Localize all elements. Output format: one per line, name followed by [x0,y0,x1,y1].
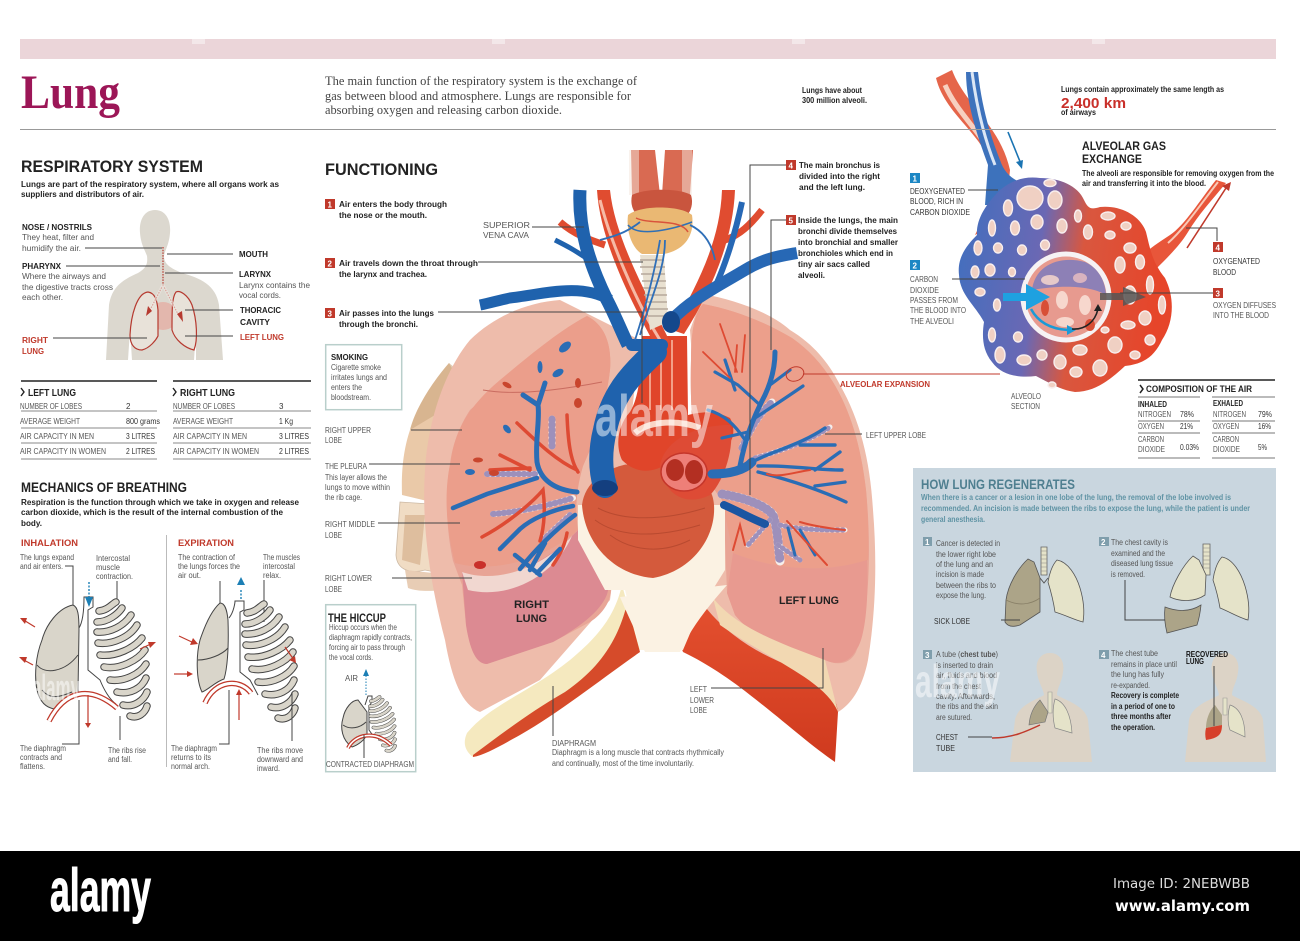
pulmonary vessels [936,70,1226,270]
label: left upper lobe [825,431,926,440]
panel: the hiccup [326,605,416,772]
arrow: oxygenated flow [1187,182,1231,248]
step 1: sick lobe: expose the lung. [936,591,986,600]
step 1: 1 [328,200,332,210]
table: left lung: 800 grams [126,417,160,426]
panel: expiration: The ribs move [257,746,303,755]
table: left lung: 2 LITRES [126,447,155,456]
label: right upper lobe: RIGHT UPPER [325,426,371,435]
step 1: sick lobe: between the ribs to [936,581,996,590]
panel: the hiccup: the vocal cords. [329,653,373,662]
veins [580,190,628,345]
icon: lung [36,605,79,709]
step 5: 5 [788,216,794,226]
icon: lung [197,603,228,692]
panel: how lung regenerates: When there is a cancer or a lesion in one lobe of the lung, the removal of the lobe involved is [921,493,1231,502]
table: composition of the air: 16% [1258,422,1271,431]
table: left lung: AIR CAPACITY IN MEN [20,432,94,441]
footer bar: Image ID: 2NEBWBB [1113,876,1250,892]
heading: respiratory system: suppliers and distributors of air. [21,190,144,199]
table: composition of the air [1138,380,1275,458]
panel: inhalation: contracts and [20,753,62,762]
title: Lung [21,66,120,119]
callout 2: carbon dioxide: THE BLOOD INTO [910,306,966,315]
arrow: carbon dioxide [1003,284,1076,335]
table: composition of the air: INHALED [1138,400,1167,409]
left lung body [690,294,875,712]
label: alveolar expansion [784,364,1000,389]
label: the pleura: the rib cage. [325,493,362,502]
panel: expiration: returns to its [171,753,211,762]
label: superior vena cava: VENA CAVA [483,231,530,240]
header band [20,39,1276,59]
table: left lung: AVERAGE WEIGHT [20,417,80,426]
step 5: Inside the lungs, the main [798,216,898,225]
label: left lower lobe [690,648,823,715]
callout 2: carbon dioxide: DIOXIDE [910,286,939,295]
fact: airway length: Lungs contain approximately the same length as [1061,85,1224,94]
table: composition of the air: 5% [1258,443,1267,452]
step 1: sick lobe: Cancer is detected in [936,539,1000,548]
table: composition of the air: CARBON [1138,435,1164,444]
arrows [240,590,242,600]
heading: mechanics of breathing: MECHANICS OF BREATHING [21,479,187,495]
step 4: recovered lung: remains in place until [1111,660,1177,669]
fact: airway length [1061,85,1224,117]
icon: diaphragm [205,683,251,703]
panel: the hiccup: Hiccup occurs when the [329,623,397,632]
label: diaphragm: DIAPHRAGM [552,739,596,748]
box: smoking: SMOKING [331,353,368,362]
watermark: right: alamy [915,655,1000,707]
step 3 [325,308,642,403]
panel: inhalation: Intercostal [96,554,130,563]
step 5: bronchioles which end in [798,249,893,258]
table: composition of the air: NITROGEN [1213,410,1246,419]
label: superior vena cava: SUPERIOR [483,221,530,230]
diaphragm [465,505,838,762]
callout 1: deoxygenated blood: CARBON DIOXIDE [910,208,970,217]
label: right lung: RIGHT [514,599,549,611]
label: the pleura [325,462,460,502]
step 2: 2 [328,260,332,268]
panel: how lung regenerates: HOW LUNG REGENERATES [921,476,1075,492]
step 2: Air travels down the throat through [339,259,478,268]
heading: mechanics of breathing: body. [21,519,42,528]
table: left lung: 2 [126,402,131,411]
panel: alveolar illustration [936,70,1226,392]
alveolar sac [959,178,1172,392]
diagram: respiratory body: humidify the air. [22,244,81,253]
table: right lung: 3 LITRES [279,432,309,441]
airway [146,247,183,322]
fact: alveoli count: Lungs have about [802,86,862,95]
panel: expiration: The muscles [263,553,300,562]
alveolar heading: EXCHANGE [1082,152,1142,166]
step 4: recovered lung: RECOVERED [1186,650,1228,659]
step 4: recovered lung: the lung has fully [1111,670,1164,679]
left lung outline [172,292,196,350]
step 1: sick lobe [923,537,1084,626]
panel: inhalation: The diaphragm [20,744,66,753]
step 1: sick lobe: 1 [925,538,930,547]
heading: respiratory system: Lungs are part of the respiratory system, where all organs work as [21,180,280,189]
table: right lung: AIR CAPACITY IN MEN [173,432,247,441]
intro text: gas between blood and atmosphere. Lungs are responsible for [325,88,632,103]
panel: how lung regenerates: recommended. An incision is made between the ribs to expose the lung, while the patient is under [921,504,1250,513]
table: composition of the air: 0.03% [1180,443,1199,452]
diagram: respiratory body: the digestive tracts cross [22,283,113,292]
step 4: recovered lung [1099,649,1266,762]
callout 2: carbon dioxide: CARBON [910,275,938,284]
heading: mechanics of breathing: carbon dioxide, which is the result of the internal combustion of the [21,508,284,517]
label: right middle lobe: LOBE [325,531,342,540]
step 3: chest tube: air, fluids and blood [936,671,997,680]
panel: expiration: The diaphragm [171,744,217,753]
step 4: recovered lung: re-expanded. [1111,681,1150,690]
panel: expiration [171,538,303,773]
step 4: recovered lung: three months after [1111,712,1171,721]
label: diaphragm: Diaphragm is a long muscle that contracts rhythmically [552,748,724,757]
alveolo section circle [1023,254,1109,340]
panel: inhalation: and air enters. [20,562,63,571]
step 2: lobe removed: examined and the [1111,549,1165,558]
table: composition of the air: COMPOSITION OF THE AIR [1146,384,1252,394]
label: right middle lobe: RIGHT MIDDLE [325,520,375,529]
label: alveolo section: ALVEOLO [1011,392,1041,401]
panel: inhalation [19,538,156,771]
callout 1: deoxygenated blood: DEOXYGENATED [910,187,965,196]
panel: expiration: normal arch. [171,762,210,771]
step 4: The main bronchus is [799,161,881,170]
table: composition of the air: EXHALED [1213,399,1243,408]
heading: mechanics of breathing: Respiration is the function through which we take in oxygen and release [21,498,300,507]
step 3: chest tube: 3 [925,651,930,660]
intro text: The main function of the respiratory system is the exchange of [325,73,638,88]
step 2: lobe removed [1099,537,1249,633]
step 5: tiny air sacs called [798,260,870,269]
alveolar heading: ALVEOLAR GAS [1082,139,1166,153]
label: right lung [514,599,549,625]
box: smoking: bloodstream. [331,393,371,402]
step 1 [325,199,447,220]
table: left lung: AIR CAPACITY IN WOMEN [20,447,106,456]
label: right upper lobe [325,426,462,445]
table: composition of the air: DIOXIDE [1213,445,1240,454]
label: right middle lobe [325,520,460,540]
step 4: recovered lung: The chest tube [1111,649,1158,658]
panel: the hiccup: CONTRACTED DIAPHRAGM [326,760,414,769]
heart tint [148,302,178,330]
panel: inhalation: INHALATION [21,538,78,549]
label: right lower lobe: LOBE [325,585,342,594]
step 4: recovered lung: Recovery is complete [1111,691,1179,700]
step 4: divided into the right [799,172,880,181]
callout 4: oxygenated blood [1186,228,1260,277]
right lung outline [130,292,158,350]
step 1: sick lobe: of the lung and an [936,560,993,569]
panel: how lung regenerates [913,468,1276,772]
label: right lower lobe: RIGHT LOWER [325,574,372,583]
step 3: chest tube: the ribs and the skin [936,702,998,711]
callout 4: oxygenated blood: 4 [1216,244,1220,252]
heading: respiratory system: RESPIRATORY SYSTEM [21,157,203,176]
label: left upper lobe: LEFT UPPER LOBE [866,431,926,440]
step 3: chest tube: A tube (chest tube) [936,650,998,659]
step 3: chest tube: cavity. Afterwards, [936,692,995,701]
step 1: sick lobe: incision is made [936,570,984,579]
label: left lower lobe: LOBE [690,706,707,715]
panel: expiration: inward. [257,764,280,773]
diagram: respiratory body: They heat, filter and [22,233,94,242]
panel: expiration: EXPIRATION [178,538,234,549]
step 2: lobe removed: is removed. [1111,570,1145,579]
text: alamy [32,667,80,708]
table: right lung: 3 [279,402,284,411]
intro text: absorbing oxygen and releasing carbon dioxide. [325,102,562,117]
fact: alveoli count: 300 million alveoli. [802,96,867,105]
label: left lung: LEFT LUNG [779,595,839,607]
label: the pleura: THE PLEURA [325,462,368,471]
alveolar heading: The alveoli are responsible for removing oxygen from the [1082,169,1274,178]
step 3: chest tube: TUBE [936,744,955,753]
diagram: respiratory body: CAVITY [240,318,271,327]
label: right lower lobe [325,574,472,594]
icon: diaphragm [49,694,117,721]
callout 2: carbon dioxide [910,260,1025,326]
step 3: chest tube: CHEST [936,733,958,742]
step 1: the nose or the mouth. [339,211,427,220]
label: right upper lobe: LOBE [325,436,342,445]
step 3: chest tube: is inserted to drain [936,661,993,670]
callout 2: carbon dioxide: PASSES FROM [910,296,958,305]
watermark: alamy [595,384,713,449]
step 3: through the bronchi. [339,320,418,329]
step 2: the larynx and trachea. [339,270,427,279]
panel: the hiccup: AIR [345,674,358,683]
step 2: lobe removed: 2 [1101,538,1106,547]
diagram: respiratory body: THORACIC [240,306,281,315]
panel: main lung illustration [396,150,875,762]
step 1: sick lobe: the lower right lobe [936,550,996,559]
step 3: chest tube [923,650,1092,762]
table: composition of the air: CARBON [1213,435,1239,444]
diagram: respiratory body: NOSE / NOSTRILS [22,223,93,232]
label lines [53,248,233,338]
table: right lung: RIGHT LUNG [180,388,235,399]
arrows [88,582,90,600]
step 3: 3 [328,310,332,318]
step 2 [325,258,643,279]
step 4: and the left lung. [799,183,865,192]
footer bar: www.alamy.com [1115,897,1250,915]
step 5 [771,215,898,350]
diagram: respiratory body: MOUTH [239,250,268,259]
box: smoking: Cigarette smoke [331,363,381,372]
alveolar heading: air and transferring it into the blood. [1082,179,1206,188]
box: smoking [326,345,402,410]
step 4 [750,160,881,495]
alveolar heading [1082,139,1274,188]
heart [582,336,733,578]
diagram: respiratory body: LEFT LUNG [240,333,284,342]
label: superior vena cava [483,221,584,240]
step 3: chest tube: from the chest [936,682,982,691]
callout 3: oxygen diffuses: INTO THE BLOOD [1213,311,1269,320]
body silhouette [106,210,223,360]
step 5: alveoli. [798,271,825,280]
table: left lung: 3 LITRES [126,432,155,441]
diagram: respiratory body: RIGHT [22,336,48,345]
left lung bronchial tree [703,324,846,565]
diagram: respiratory body [22,210,311,360]
diagram: respiratory body: LARYNX [239,270,272,279]
table: composition of the air: OXYGEN [1213,422,1239,431]
icon: hiccup lung diagram [342,696,395,758]
step 2: lobe removed: diseased lung tissue [1111,559,1173,568]
table: composition of the air: DIOXIDE [1138,445,1165,454]
callout 3: oxygen diffuses: 3 [1216,290,1220,298]
arrow: deoxygenated flow [1008,132,1023,169]
label: the pleura: lungs to move within [325,483,390,492]
callout 1: deoxygenated blood: 1 [912,174,918,184]
table: composition of the air: NITROGEN [1138,410,1171,419]
fact: airway length: of airways [1061,108,1096,117]
arrow: oxygen [1072,287,1146,329]
panel: inhalation: The ribs rise [108,746,146,755]
label: alveolo section [1011,392,1041,411]
pleura flaps [396,363,470,591]
label: diaphragm: and continually, most of the time involuntarily. [552,759,694,768]
callout 3: oxygen diffuses [1120,288,1276,320]
right lung body [424,300,640,712]
step 1: sick lobe: SICK LOBE [934,617,970,626]
table: right lung: NUMBER OF LOBES [173,402,235,411]
table: left lung: LEFT LUNG [28,388,76,399]
table: right lung: AVERAGE WEIGHT [173,417,233,426]
panel: expiration: intercostal [263,562,295,571]
heading: mechanics of breathing [21,479,300,528]
callout 4: oxygenated blood: OXYGENATED [1213,257,1260,266]
footer bar [0,851,1300,941]
panel: inhalation: contraction. [96,572,133,581]
callout 2: carbon dioxide: 2 [912,262,918,270]
diagram: respiratory body: Larynx contains the [239,281,311,290]
step 4: 4 [788,162,794,170]
panel: inhalation: and fall. [108,755,132,764]
table: right lung: 2 LITRES [279,447,309,456]
table: right lung [173,381,311,459]
right lung bronchial tree [453,339,582,575]
panel: expiration: air out. [178,571,201,580]
diagram: respiratory body: each other. [22,293,63,302]
callout 1: deoxygenated blood: BLOOD, RICH IN [910,197,963,206]
fact: alveoli count [802,86,867,105]
step 2: lobe removed: The chest cavity is [1111,538,1168,547]
label: alveolar expansion: ALVEOLAR EXPANSION [840,380,930,389]
callout 3: oxygen diffuses: OXYGEN DIFFUSES [1213,301,1276,310]
panel: the hiccup: forcing air to pass through [329,643,405,652]
panel: the hiccup: diaphragm rapidly contracts, [329,633,412,642]
diagram: respiratory body: vocal cords. [239,291,281,300]
great vessels [480,150,797,496]
panel: expiration: downward and [257,755,303,764]
table: left lung [20,381,160,459]
panel: expiration: relax. [263,571,281,580]
step 1: Air enters the body through [339,200,447,209]
table: composition of the air: 79% [1258,410,1272,419]
step 4: recovered lung: 4 [1101,651,1106,660]
panel: inhalation: The lungs expand [20,553,74,562]
label: left lower lobe: LEFT [690,685,707,694]
callout 1: deoxygenated blood [910,173,998,217]
intro text [325,73,638,117]
step 3: chest tube: are sutured. [936,713,972,722]
label: right lung: LUNG [516,613,547,625]
heading: respiratory system [21,157,280,199]
trachea [640,255,668,330]
label: left lower lobe: LOWER [690,696,714,705]
callout 2: carbon dioxide: THE ALVEOLI [910,317,954,326]
table: right lung: 1 Kg [279,417,293,426]
step 3: Air passes into the lungs [339,309,435,318]
label: alveolo section: SECTION [1011,402,1040,411]
panel: the hiccup: THE HICCUP [328,611,386,625]
table: composition of the air: 21% [1180,422,1193,431]
larynx [628,150,693,254]
table: right lung: AIR CAPACITY IN WOMEN [173,447,259,456]
fact: airway length: 2,400 km [1061,95,1126,112]
panel: expiration: the lungs forces the [178,562,240,571]
panel: inhalation: flattens. [20,762,45,771]
box: smoking: irritates lungs and [331,373,387,382]
diagram: respiratory body: Where the airways and [22,272,106,281]
step 4: recovered lung: the operation. [1111,723,1155,732]
step 5: bronchi divide themselves [798,227,898,236]
panel: how lung regenerates: general anesthesia. [921,515,985,524]
table: composition of the air: 78% [1180,410,1194,419]
step 5: into bronchial and smaller [798,238,898,247]
footer bar: alamy [50,857,151,924]
panel: inhalation: muscle [96,563,121,572]
step 4: recovered lung: LUNG [1186,657,1204,666]
diagram: respiratory body: LUNG [22,347,44,356]
table: left lung: NUMBER OF LOBES [20,402,82,411]
step 4: recovered lung: in a period of one to [1111,702,1175,711]
heading: functioning: FUNCTIONING [325,160,438,179]
table: composition of the air: OXYGEN [1138,422,1164,431]
label: the pleura: This layer allows the [325,473,387,482]
label: diaphragm [552,686,724,768]
diagram: respiratory body: PHARYNX [22,262,62,271]
box: smoking: enters the [331,383,362,392]
callout 4: oxygenated blood: BLOOD [1213,268,1236,277]
panel: expiration: The contraction of [178,553,236,562]
